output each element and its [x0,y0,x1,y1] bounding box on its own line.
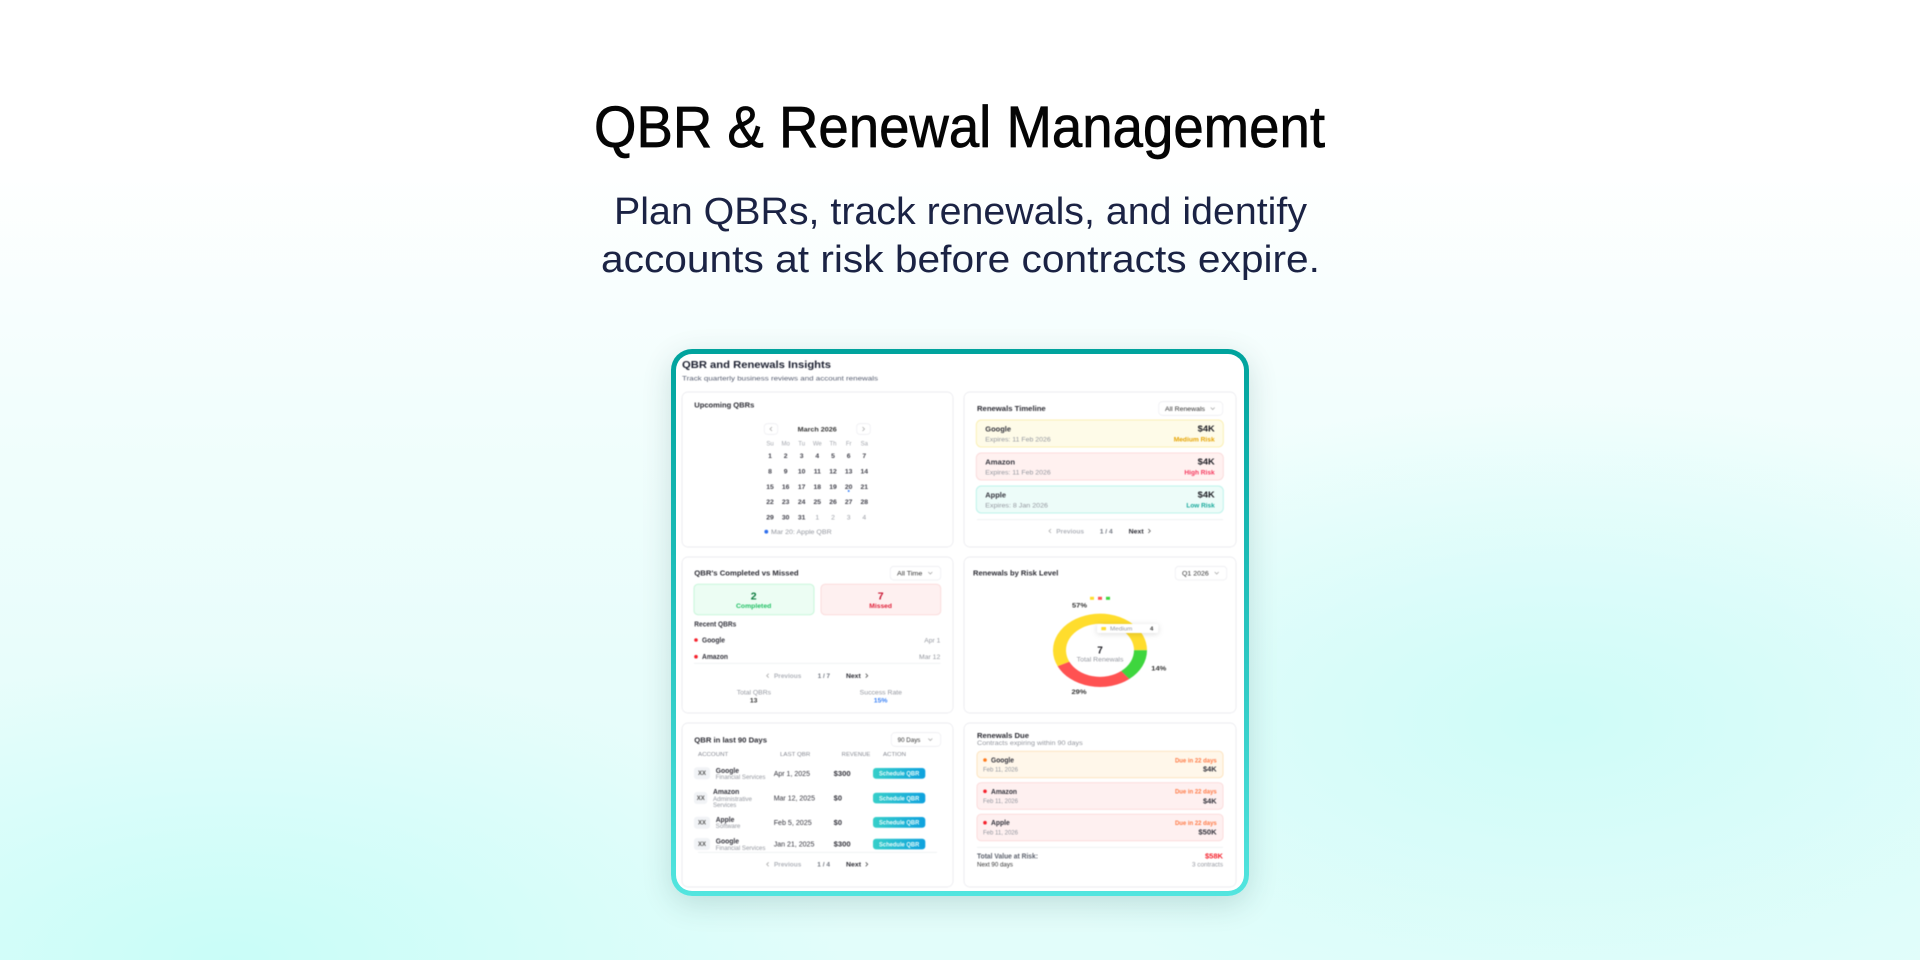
pagination: recent QBRs: Previous [774,673,802,680]
table header: LAST QBR [780,752,810,758]
summary: success rate: Success Rate [860,689,902,696]
chart tooltip: Medium [1110,626,1133,632]
table row: Apple: $0 [834,818,842,827]
table row: Apple: Software [716,824,741,830]
calendar: 9 [784,468,788,476]
dropdown: all time: All Time [897,570,923,577]
total value at risk [977,852,1224,868]
calendar: 15 [766,484,774,491]
stat: completed: 2 [751,590,757,602]
table row: Google second: Jan 21, 2025 [774,840,814,849]
calendar: 16 [782,484,790,491]
calendar: 18 [814,484,821,491]
panel: QBRs completed vs missed [682,557,953,713]
panel: renewals by risk level [964,557,1236,713]
summary: success rate: 15% [874,698,888,704]
calendar: March 2026 [798,427,837,434]
calendar: 12 [829,468,837,476]
heading: risk level: Renewals by Risk Level [973,569,1058,578]
card: Google medium risk [976,420,1223,447]
dropdown: Q1 2026 [1175,566,1227,580]
table header: ACTION [883,752,906,758]
subtitle: accounts at risk before contracts expire. [601,239,1320,281]
dropdown: all time [890,566,941,580]
card: Amazon high risk: Amazon [985,457,1015,466]
calendar: 1 [768,453,772,460]
table row: Google: $300 [834,769,851,778]
heading: completed vs missed: QBR's Completed vs Missed [694,569,799,578]
calendar: Mo [782,441,791,447]
dropdown: all renewals: All Renewals [1165,406,1206,413]
card: Google medium risk: Google [985,424,1011,433]
calendar: Tu [798,441,805,447]
pagination: table: Previous [774,862,802,869]
summary: total QBRs: Total QBRs [737,689,772,696]
donut chart [1059,619,1140,682]
dashboard heading [682,360,879,382]
table row: Google second: Google [716,836,739,846]
card: Amazon high risk: $4K [1198,458,1215,467]
card: Amazon due [977,783,1223,809]
table header: ACCOUNT [698,752,729,758]
dashboard heading: QBR and Renewals Insights [682,360,831,371]
subtitle: Plan QBRs, track renewals, and identify [614,191,1307,233]
table row: Google second: XX [698,842,706,848]
calendar: 30 [782,514,790,522]
calendar: 19 [829,484,837,491]
card: Amazon due: Amazon [991,787,1017,796]
card: Amazon high risk: High Risk [1184,470,1215,477]
header text block [594,95,1325,281]
card: Google due: $4K [1203,765,1218,774]
pagination: timeline: Previous [1056,528,1084,535]
card: Amazon due: Due in 22 days [1175,789,1217,796]
title: QBR & Renewal Management [594,95,1325,160]
calendar: 3 [800,453,804,460]
summary: total QBRs: 13 [750,698,758,704]
table row: Google: Apr 1, 2025 [774,769,810,778]
calendar legend: Mar 20: Apple QBR [771,529,832,536]
card: Apple low risk: Apple [985,490,1006,499]
calendar: 8 [768,468,772,476]
heading: renewals due: Renewals Due [977,731,1029,740]
calendar: Th [829,441,837,447]
heading: renewals due [977,731,1083,747]
total value at risk: Next 90 days [977,862,1013,868]
calendar: Sa [861,441,869,447]
calendar: 28 [861,499,868,506]
donut center label: Total Renewals [1077,657,1124,664]
table header: REVENUE [842,752,871,758]
calendar: 6 [847,453,851,460]
stat: completed [694,584,814,615]
dropdown: all renewals [1159,402,1223,415]
table row: Google second [694,836,925,852]
donut percent labels: 14% [1151,666,1166,672]
table row: Google second: Financial Services [716,846,765,852]
pagination: table: 1 / 4 [817,862,830,869]
table row: Amazon: XX [697,796,705,802]
calendar: 22 [766,499,774,506]
table row: Google second: $300 [834,840,851,849]
card: Apple due: Feb 11, 2026 [983,829,1019,836]
chart legend swatches [1090,597,1110,600]
calendar: 5 [831,453,835,460]
card: Google medium risk: Medium Risk [1174,437,1215,444]
calendar: 31 [798,514,806,522]
card: Amazon due: Feb 11, 2026 [983,798,1019,805]
pagination: recent QBRs: 1 / 7 [818,673,830,680]
card: Apple low risk: $4K [1198,491,1215,500]
pagination: table: Next [846,862,862,869]
total value at risk: $58K [1205,852,1224,861]
dropdown: 90 days: 90 Days [898,738,920,744]
heading: last 90 days: QBR in last 90 Days [694,736,767,744]
calendar: We [813,441,822,447]
card: Apple due: Due in 22 days [1175,820,1217,827]
card: Apple low risk: Low Risk [1186,503,1215,510]
calendar: 4 [862,514,866,522]
stat: completed: Completed [736,603,771,610]
heading: upcoming QBRs: Upcoming QBRs [694,400,754,410]
donut percent labels: 29% [1072,689,1086,696]
panel: upcoming QBRs [682,392,953,547]
table row: Apple: Apple [716,815,734,824]
calendar: Fr [846,441,852,447]
recent QBRs list: Mar 12 [919,654,941,661]
calendar: 21 [861,484,868,491]
recent QBRs list: Apr 1 [924,638,941,644]
calendar: 27 [845,499,853,506]
table row: Apple: Schedule QBR [879,821,920,827]
stat: missed [821,584,941,615]
card: Google due: Google [991,756,1014,764]
donut percent labels [1072,602,1166,696]
calendar: 24 [798,499,806,506]
table row: Google [694,766,925,781]
donut center label: 7 [1097,646,1103,656]
calendar: 1 [815,514,819,522]
pagination: timeline: Next [1129,528,1144,535]
dashboard heading: Track quarterly business reviews and account renewals [682,376,879,382]
card: Apple due: Apple [991,818,1010,827]
subtitle [601,191,1320,281]
stat: missed: 7 [878,590,884,602]
panel: renewals timeline [964,392,1236,547]
recent QBRs list: Recent QBRs [694,620,736,629]
calendar: 14 [861,468,868,476]
table row: Amazon: $0 [834,794,842,803]
table row: Apple: XX [698,821,706,827]
table row: Google: Google [716,766,739,775]
summary: total QBRs [737,689,772,704]
calendar: 23 [782,499,790,506]
table row: Google: Financial Services [716,775,765,781]
donut percent labels: 57% [1072,602,1087,610]
recent QBRs list: Google [702,636,725,644]
dropdown: 90 days [891,733,941,746]
card: Amazon due: $4K [1203,796,1218,805]
table row: Apple [694,815,925,830]
dropdown: Q1 2026: Q1 2026 [1182,570,1209,577]
card: Apple due [977,814,1223,841]
calendar: Su [766,441,774,447]
calendar: 17 [798,484,806,491]
pagination: timeline: 1 / 4 [1100,528,1113,535]
table row: Apple: Feb 5, 2025 [774,818,812,827]
card: Apple low risk: Expires: 8 Jan 2026 [985,503,1048,510]
pagination: recent QBRs: Next [846,673,861,680]
heading: renewals due: Contracts expiring within 90 days [977,740,1083,747]
calendar: 26 [829,499,837,506]
card: Google medium risk: Expires: 11 Feb 2026 [985,437,1051,444]
panel: QBR in last 90 days [682,723,953,887]
calendar: 13 [845,468,853,476]
table row: Amazon: Schedule QBR [879,796,920,802]
summary: success rate [860,689,902,704]
table row: Google: XX [698,771,706,777]
card: Google medium risk: $4K [1198,425,1215,434]
table header [698,752,906,758]
calendar: 25 [814,499,821,506]
recent QBRs list: Amazon [702,652,728,661]
calendar [764,424,870,522]
table row: Google: Schedule QBR [879,772,920,778]
panel: renewals due [964,723,1236,887]
recent QBRs list [694,620,941,661]
pagination: table [767,862,868,869]
table row: Google second: Schedule QBR [879,842,920,848]
calendar: 20 [845,484,853,491]
stat: missed: Missed [869,603,892,610]
calendar: 3 [847,514,851,522]
heading: renewals timeline: Renewals Timeline [977,404,1046,413]
calendar: 2 [784,453,788,460]
card: Apple due: $50K [1198,828,1218,837]
donut center label [1077,646,1124,664]
total value at risk: 3 contracts [1192,862,1223,868]
calendar: 7 [862,453,866,460]
chart tooltip: 4 [1150,626,1154,632]
calendar: 2 [831,514,835,522]
total value at risk: Total Value at Risk: [977,852,1038,860]
dashboard screenshot frame [671,349,1249,896]
table row: Amazon [694,787,925,809]
calendar: 10 [798,468,806,476]
pagination: recent QBRs [767,673,868,680]
calendar: 4 [815,453,819,460]
pagination: timeline [1049,528,1150,535]
calendar: 29 [766,514,774,522]
card: Amazon high risk [976,453,1223,480]
table row: Amazon: Amazon [713,787,739,796]
table row: Amazon: Services [713,803,736,809]
card: Amazon high risk: Expires: 11 Feb 2026 [985,470,1051,477]
card: Google due: Due in 22 days [1175,757,1217,764]
card: Google due: Feb 11, 2026 [983,766,1019,773]
card: Google due [977,751,1223,778]
table row: Amazon: Mar 12, 2025 [774,794,815,803]
card: Apple low risk [976,486,1223,513]
table row: Amazon: Administrative [713,797,753,803]
calendar: 11 [814,468,821,476]
chart tooltip [1097,624,1158,633]
